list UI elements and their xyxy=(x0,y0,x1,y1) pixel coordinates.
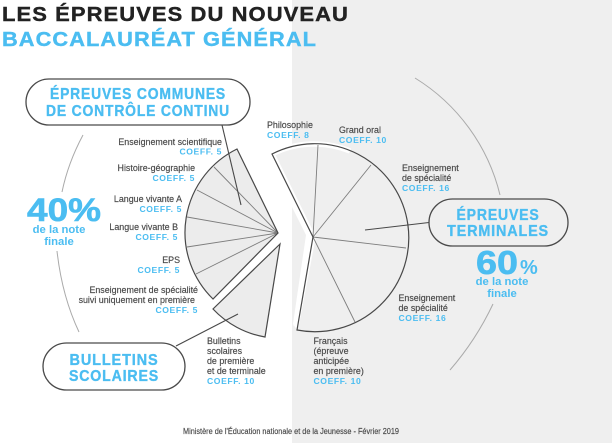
stat: 40 percent: finale xyxy=(44,236,74,248)
label: enseignement de spécialité première: Enseignement de spécialité xyxy=(89,285,198,295)
arc: 60% bracket xyxy=(415,78,500,370)
pie: school reports xyxy=(213,244,280,337)
label: spécialité 2: COEFF. 16 xyxy=(398,313,446,323)
stat: 40 percent: de la note xyxy=(33,224,85,236)
stat: 60 percent: 60 xyxy=(476,244,518,281)
label: spécialité 2: de spécialité xyxy=(398,303,448,313)
source footer: Ministère de l'Éducation nationale et de la Jeunesse - Février 2019 xyxy=(183,427,399,436)
label: enseignement de spécialité première: suivi uniquement en première xyxy=(79,295,195,305)
label: français: en première) xyxy=(314,366,364,376)
label: spécialité 1: de spécialité xyxy=(402,173,451,183)
label: EPS: EPS xyxy=(162,255,180,265)
label: langue vivante A: COEFF. 5 xyxy=(139,204,182,214)
stat: 60 percent: finale xyxy=(487,288,517,300)
label: langue vivante A: Langue vivante A xyxy=(114,194,182,204)
label: enseignement de spécialité première: COEFF. 5 xyxy=(155,305,198,315)
pill: bulletins scolaires xyxy=(43,343,185,390)
stat: 60 percent: de la note xyxy=(476,276,528,288)
label: bulletins: de première xyxy=(207,356,254,366)
pill: épreuves terminales: TERMINALES xyxy=(447,223,549,240)
label: bulletins xyxy=(207,336,266,386)
stat: 60 percent xyxy=(476,244,538,300)
label: français xyxy=(314,336,364,386)
title xyxy=(2,3,349,51)
label: enseignement scientifique: COEFF. 5 xyxy=(179,146,222,156)
pill: épreuves communes xyxy=(26,79,250,125)
pie: final exams xyxy=(272,144,409,332)
label: philosophie xyxy=(267,120,313,140)
callout line: common assessment xyxy=(222,125,241,205)
label: grand oral: COEFF. 10 xyxy=(339,135,387,145)
stat: 40 percent: 40% xyxy=(27,192,101,228)
label: histoire-géographie: COEFF. 5 xyxy=(152,173,195,183)
label: philosophie: COEFF. 8 xyxy=(267,130,310,140)
pill: épreuves communes: DE CONTRÔLE CONTINU xyxy=(46,102,230,120)
label: bulletins: Bulletins xyxy=(207,336,241,346)
label: français: anticipée xyxy=(314,356,349,366)
label: enseignement de spécialité première xyxy=(79,285,198,315)
pill: épreuves communes: ÉPREUVES COMMUNES xyxy=(50,86,226,103)
label: EPS: COEFF. 5 xyxy=(137,265,180,275)
label: grand oral xyxy=(339,125,387,145)
label: langue vivante B: Langue vivante B xyxy=(109,222,178,232)
label: histoire-géographie xyxy=(118,163,195,183)
label: langue vivante A xyxy=(114,194,182,214)
callout line: final exams xyxy=(365,222,429,230)
pill: bulletins scolaires: SCOLAIRES xyxy=(69,368,159,385)
callout line: school reports xyxy=(176,314,238,346)
grey background panel xyxy=(292,0,612,443)
label: enseignement scientifique: Enseignement scientifique xyxy=(118,137,222,147)
label: grand oral: Grand oral xyxy=(339,125,381,135)
arc: 40% bracket xyxy=(57,135,83,332)
title: LES ÉPREUVES DU NOUVEAU xyxy=(2,3,349,26)
label: spécialité 2 xyxy=(398,293,456,323)
label: philosophie: Philosophie xyxy=(267,120,313,130)
label: français: (épreuve xyxy=(314,346,349,356)
pill: épreuves terminales: ÉPREUVES xyxy=(456,207,540,224)
label: bulletins: scolaires xyxy=(207,346,243,356)
label: histoire-géographie: Histoire-géographie xyxy=(118,163,195,173)
label: EPS xyxy=(137,255,180,275)
label: bulletins: et de terminale xyxy=(207,366,266,376)
stat: 40 percent xyxy=(27,192,101,248)
label: langue vivante B: COEFF. 5 xyxy=(135,232,178,242)
label: spécialité 1 xyxy=(402,163,459,193)
pill: épreuves terminales xyxy=(429,199,568,246)
pie: common continuous assessment xyxy=(185,149,278,299)
label: spécialité 2: Enseignement xyxy=(398,293,456,303)
stat: 60 percent: % xyxy=(520,257,538,279)
label: bulletins: COEFF. 10 xyxy=(207,376,255,386)
label: spécialité 1: Enseignement xyxy=(402,163,459,173)
label: spécialité 1: COEFF. 16 xyxy=(402,183,450,193)
pill: bulletins scolaires: BULLETINS xyxy=(70,352,158,369)
label: français: COEFF. 10 xyxy=(314,376,361,386)
label: langue vivante B xyxy=(109,222,178,242)
label: enseignement scientifique xyxy=(118,137,222,156)
label: français: Français xyxy=(314,336,348,346)
title: BACCALAURÉAT GÉNÉRAL xyxy=(2,28,317,51)
